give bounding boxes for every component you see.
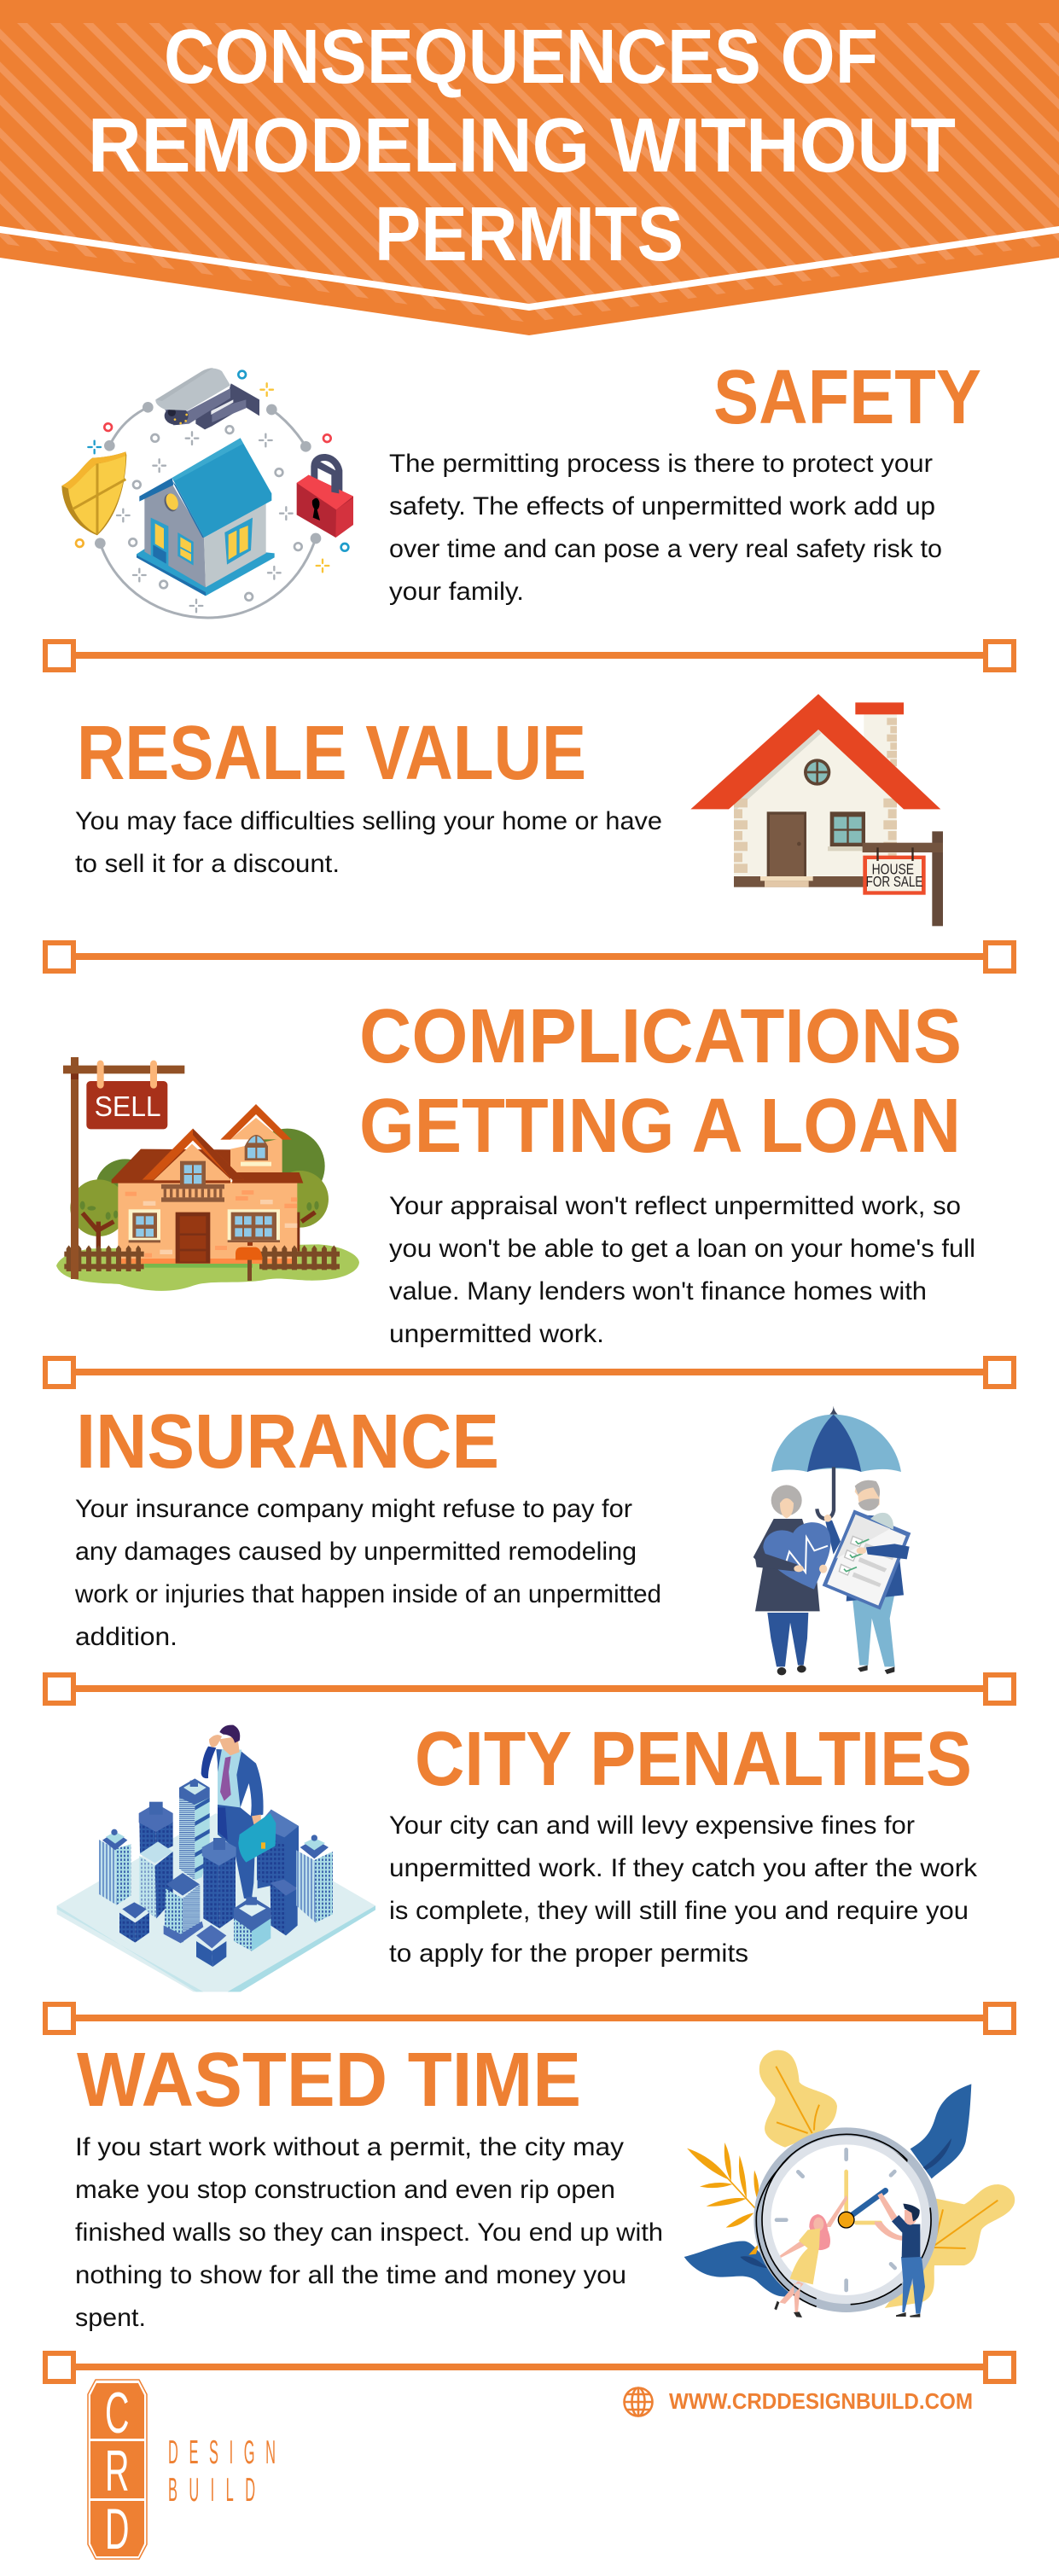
heading: complications getting a loan: COMPLICATIONS	[359, 994, 962, 1079]
panel: wasted time	[75, 2038, 1015, 2332]
text block: resale value: to sell it for a discount.	[75, 850, 340, 878]
icon: house with sell sign	[56, 1057, 359, 1291]
clipboard	[823, 1509, 911, 1610]
logo wordmark: DESIGN	[168, 2434, 276, 2471]
text block: loan: you won't be able to get a loan on your home's full	[389, 1235, 975, 1263]
text block: city penalties: unpermitted work. If they catch you after the work	[389, 1854, 978, 1882]
text block: loan: unpermitted work.	[389, 1320, 604, 1348]
woman	[754, 1485, 820, 1675]
man	[824, 1480, 904, 1674]
text block: insurance: addition.	[75, 1623, 177, 1651]
text block: loan: Your appraisal won't reflect unpermitted work, so	[389, 1192, 961, 1220]
heading: insurance: INSURANCE	[76, 1399, 499, 1485]
sign post: SELL	[95, 1091, 161, 1123]
icon: couple under umbrella with heart and checklist	[754, 1406, 911, 1675]
title banner	[0, 0, 1059, 335]
text block: wasted time: nothing to show for all the time and money you	[75, 2261, 626, 2289]
icon: house with security camera, shield and lock	[61, 368, 353, 618]
heart	[763, 1522, 830, 1590]
panel: complications getting a loan	[56, 994, 975, 1348]
text block: city penalties: is complete, they will still fine you and require you	[389, 1897, 969, 1925]
logo: CRD Design Build: R	[105, 2439, 129, 2503]
panel: city penalties	[57, 1717, 978, 1992]
heading: wasted time: WASTED TIME	[77, 2038, 581, 2123]
text block: safety: your family.	[389, 578, 524, 606]
title	[88, 15, 956, 277]
text block: insurance: Your insurance company might refuse to pay for	[75, 1495, 632, 1523]
heading: safety: SAFETY	[713, 355, 981, 440]
text block: safety: over time and can pose a very real safety risk to	[389, 535, 942, 563]
buildings	[99, 1778, 333, 1967]
heading: complications getting a loan	[359, 994, 962, 1169]
text block: resale value: You may face difficulties selling your home or have	[75, 807, 662, 835]
panel: insurance	[74, 1399, 911, 1675]
text block: resale value	[75, 807, 662, 878]
heading: resale value: RESALE VALUE	[77, 711, 586, 796]
website link	[625, 2387, 973, 2416]
man	[875, 2193, 925, 2317]
text block: safety: The permitting process is there to protect your	[389, 450, 933, 478]
text block: city penalties: Your city can and will levy expensive fines for	[389, 1811, 915, 1840]
text block: loan: value. Many lenders won't finance homes with	[389, 1277, 927, 1305]
website url: WWW.CRDDESIGNBUILD.COM	[669, 2388, 973, 2414]
text block: insurance: work or injuries that happen inside of an unpermitted	[74, 1580, 661, 1608]
panel: safety	[61, 355, 981, 618]
icon: house for sale	[690, 694, 943, 926]
text block: insurance	[74, 1495, 661, 1651]
heading: city penalties: CITY PENALTIES	[415, 1717, 972, 1802]
logo: CRD Design Build	[88, 2380, 276, 2561]
text block: loan	[389, 1192, 975, 1348]
icon: businessman over isometric city	[57, 1725, 375, 1992]
text block: safety: safety. The effects of unpermitted work add up	[389, 492, 935, 520]
text block: wasted time	[75, 2133, 663, 2332]
title: REMODELING WITHOUT	[88, 103, 956, 189]
text block: city penalties	[389, 1811, 978, 1968]
logo: CRD Design Build: C	[105, 2381, 129, 2445]
blue house	[137, 438, 275, 596]
text block: wasted time: If you start work without a permit, the city may	[75, 2133, 624, 2161]
businessman	[201, 1725, 264, 1899]
heading: complications getting a loan: GETTING A LOAN	[359, 1084, 961, 1169]
icon: house for sale: HOUSE	[872, 860, 914, 877]
icon: house for sale: FOR SALE	[866, 873, 922, 890]
panel: resale value	[75, 694, 943, 926]
icon: globe	[625, 2387, 652, 2416]
title: CONSEQUENCES OF	[164, 15, 878, 100]
text block: safety	[389, 450, 942, 606]
text block: city penalties: to apply for the proper permits	[389, 1939, 748, 1968]
icon: clock with leaves and two people	[684, 2050, 1015, 2317]
text block: wasted time: finished walls so they can inspect. You end up with	[75, 2218, 663, 2247]
woman	[774, 2195, 847, 2317]
logo: CRD Design Build: D	[105, 2497, 129, 2561]
camera	[155, 368, 259, 429]
logo wordmark	[168, 2434, 276, 2509]
text block: wasted time: spent.	[75, 2304, 146, 2332]
title: PERMITS	[375, 192, 684, 277]
text block: wasted time: make you stop construction and even rip open	[75, 2176, 615, 2204]
padlock	[297, 457, 353, 538]
shield	[61, 451, 126, 535]
sign post	[63, 1057, 184, 1279]
logo wordmark: BUILD	[168, 2472, 255, 2509]
text block: insurance: any damages caused by unpermitted remodeling	[75, 1538, 637, 1566]
